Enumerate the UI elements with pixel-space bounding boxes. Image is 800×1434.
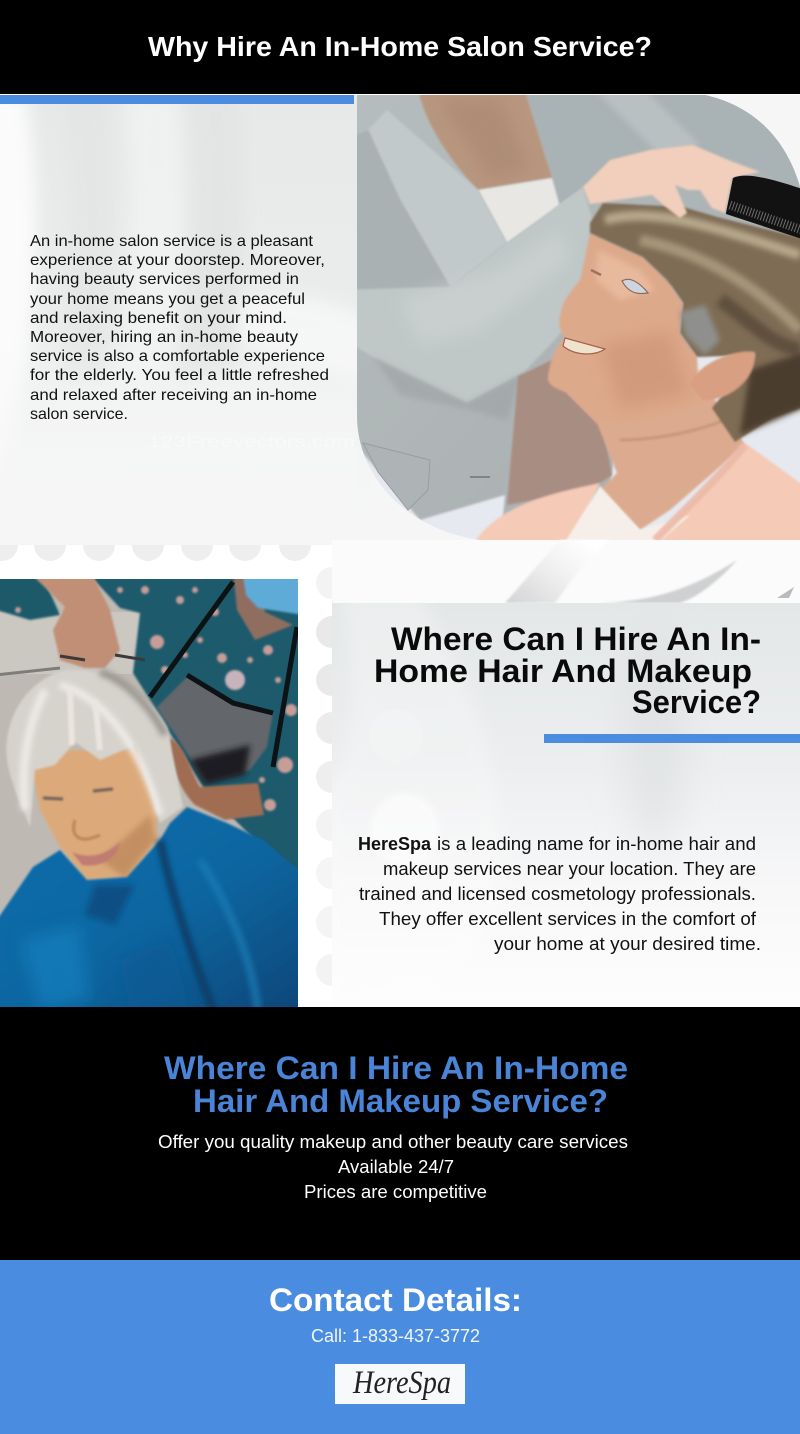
heading: where can I hire: Home Hair And Makeup xyxy=(374,653,752,689)
hair xyxy=(590,203,800,442)
intro paragraph: and relaxed after receiving an in-home xyxy=(30,387,317,404)
contact heading: Contact Details: xyxy=(269,1282,522,1318)
intro paragraph: your home means you get a peaceful xyxy=(30,291,305,308)
smile xyxy=(72,842,120,866)
logo: HereSpa: HereSpa xyxy=(352,1365,451,1401)
benefits heading: Where Can I Hire An In-Home xyxy=(164,1050,628,1086)
title: Why Hire An In-Home Salon Service? xyxy=(148,31,652,62)
photo: hairdresser cutting an elderly woman's hair xyxy=(0,570,310,1015)
stamp frame: scalloped strip xyxy=(0,545,332,986)
left lapel xyxy=(368,110,507,287)
heading: where can I hire: Service? xyxy=(632,684,761,720)
sleeve xyxy=(345,187,598,403)
intro paragraph: service is also a comfortable experience xyxy=(30,348,325,365)
HereSpa paragraph: your home at your desired time. xyxy=(494,934,761,954)
face xyxy=(32,750,157,880)
hand with scissors xyxy=(34,579,121,670)
wall xyxy=(0,612,150,674)
panel: where to hire xyxy=(332,603,800,884)
benefits heading: Hair And Makeup Service? xyxy=(193,1083,608,1119)
neck xyxy=(567,393,746,530)
swoosh area right of stamp xyxy=(332,540,800,603)
intro paragraph: for the elderly. You feel a little refreshed xyxy=(30,367,329,384)
header band xyxy=(0,0,800,94)
heading: where can I hire: Where Can I Hire An In- xyxy=(391,621,761,657)
phone number: Call: 1-833-437-3772 xyxy=(311,1326,480,1346)
HereSpa paragraph: makeup services near your location. They are xyxy=(383,859,756,879)
photo: carer combing an elderly woman's hair xyxy=(340,85,800,550)
face xyxy=(548,233,700,423)
brown undershirt xyxy=(507,355,612,505)
blue accent bar xyxy=(544,734,800,743)
right shoulder xyxy=(528,95,800,186)
benefits heading xyxy=(164,1050,628,1119)
mask xyxy=(242,579,298,616)
intro paragraph: Moreover, hiring an in-home beauty xyxy=(30,329,298,346)
intro paragraph: having beauty services performed in xyxy=(30,271,299,288)
HereSpa paragraph: is a leading name for in-home hair and xyxy=(437,834,756,854)
ear xyxy=(690,351,755,400)
intro paragraph: and relaxing benefit on your mind. xyxy=(30,310,287,327)
intro paragraph xyxy=(30,233,329,423)
mouth xyxy=(563,338,605,354)
benefits list xyxy=(158,1132,628,1202)
benefits list: Prices are competitive xyxy=(304,1182,487,1202)
panel: black benefits band xyxy=(0,1007,800,1260)
benefits list: Available 24/7 xyxy=(338,1157,454,1177)
panel: intro text xyxy=(0,95,800,545)
benefits list: Offer you quality makeup and other beauty care services xyxy=(158,1132,628,1152)
HereSpa paragraph: They offer excellent services in the comfort of xyxy=(379,909,757,929)
blue accent bar xyxy=(0,95,354,104)
neck skin xyxy=(417,85,552,190)
intro paragraph: experience at your doorstep. Moreover, xyxy=(30,252,325,269)
hair xyxy=(6,670,183,827)
flower spots xyxy=(15,586,297,811)
apron xyxy=(157,677,273,782)
eyes xyxy=(43,789,113,799)
faint watermark: 123Freevectors.com xyxy=(148,434,355,451)
eye xyxy=(622,279,648,294)
nose xyxy=(74,820,100,839)
panel: contact band xyxy=(0,1260,800,1434)
pocket xyxy=(363,443,430,510)
heading: where can I hire xyxy=(374,621,761,720)
HereSpa paragraph: trained and licensed cosmetology professionals. xyxy=(359,884,756,904)
HereSpa paragraph xyxy=(358,834,761,954)
floral blouse xyxy=(93,579,298,872)
hand and arm holding cape xyxy=(170,738,264,820)
intro paragraph: An in-home salon service is a pleasant xyxy=(30,233,314,250)
left sleeve xyxy=(0,579,61,622)
jacket body xyxy=(357,95,800,520)
cape xyxy=(0,807,310,1015)
hand xyxy=(583,145,760,218)
cardigan xyxy=(476,442,800,540)
white top xyxy=(478,177,560,242)
neck xyxy=(233,570,293,640)
HereSpa paragraph: HereSpa xyxy=(358,834,432,854)
comb xyxy=(726,176,800,240)
intro paragraph: salon service. xyxy=(30,406,128,423)
